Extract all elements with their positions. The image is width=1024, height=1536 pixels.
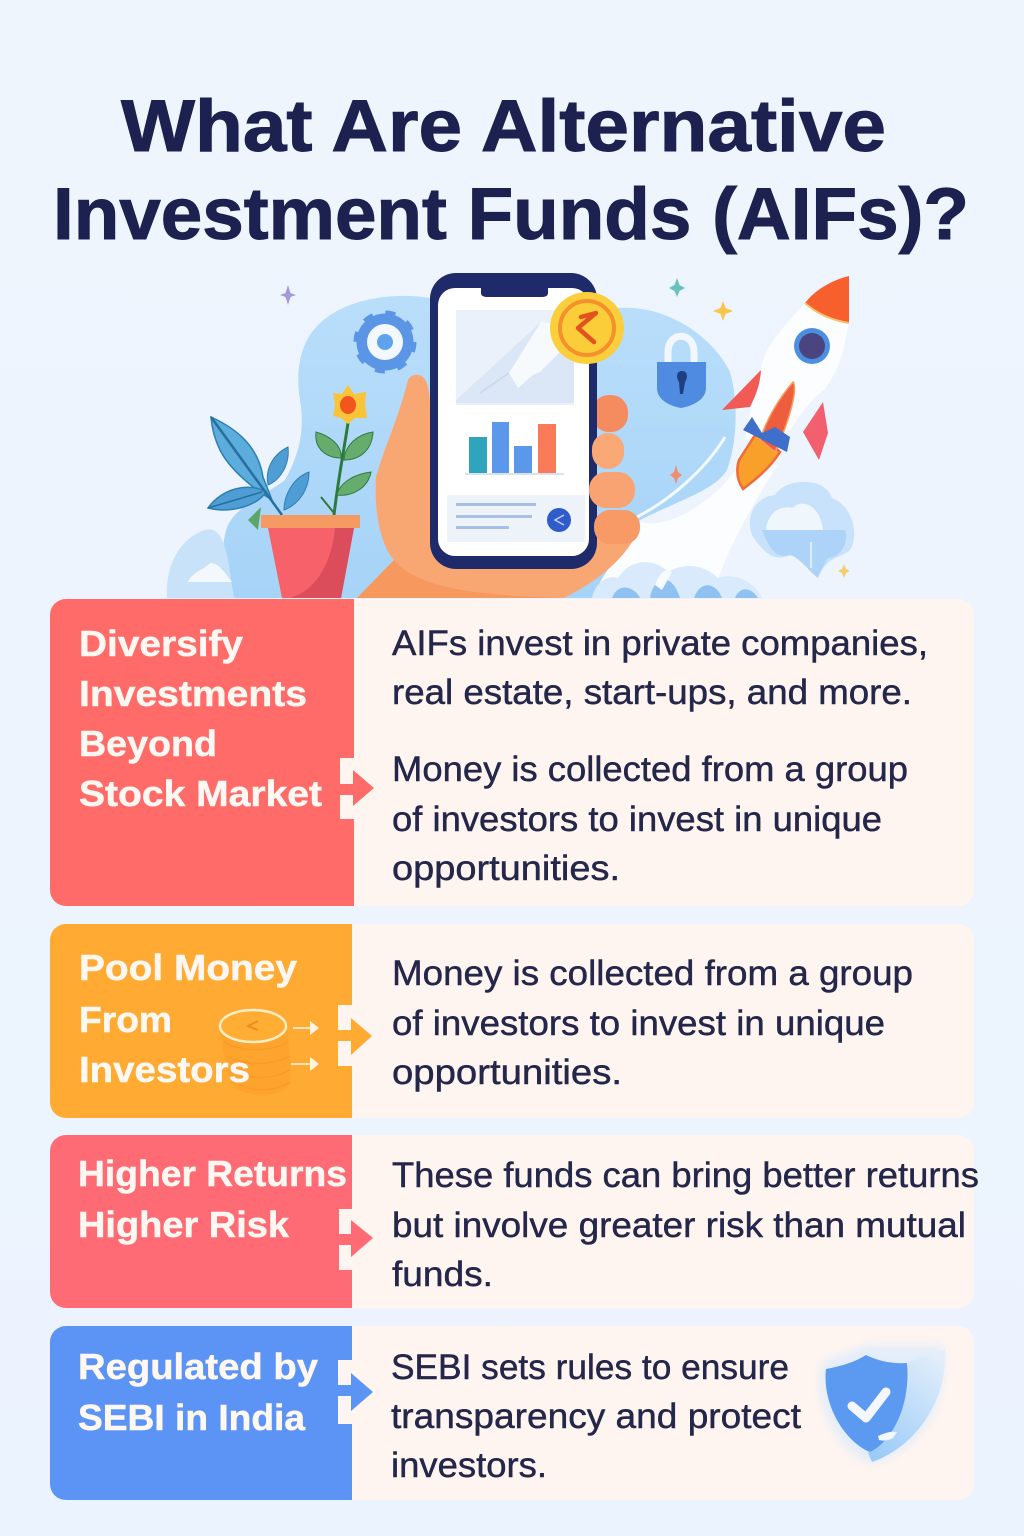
hand fingers [589, 433, 640, 544]
panel 4 body text: transparency and protect [391, 1397, 801, 1436]
panel 2 heading block: Pool Money [79, 947, 297, 988]
panel 1 heading block: Beyond [79, 723, 217, 764]
icon: gear [356, 313, 414, 371]
plant in pot [208, 385, 373, 598]
icon: rupee coin [550, 292, 624, 364]
panel 3 body text: funds. [392, 1255, 493, 1294]
panel 1 arrow [340, 758, 374, 819]
chart card [456, 310, 574, 405]
title: Investment Funds (AIFs)? [53, 174, 969, 255]
panel 1 body text [392, 624, 928, 888]
panel 2 heading block [50, 924, 352, 1118]
panel 1 body text: AIFs invest in private companies, [392, 624, 928, 663]
panel 1 body text: Money is collected from a group [392, 750, 908, 789]
exhaust clouds [592, 562, 762, 598]
panel 3 arrow [339, 1209, 373, 1270]
panel 1 heading block: Investments [79, 673, 307, 714]
rocket with exhaust trail [592, 276, 849, 598]
panel 1 heading block: Stock Market [79, 773, 322, 814]
panel 3: returns and risk [50, 1135, 979, 1308]
bar chart [465, 422, 564, 475]
panel 3 heading block: Higher Risk [78, 1204, 290, 1245]
panel 2 body text: opportunities. [392, 1053, 622, 1092]
phone [430, 273, 597, 569]
panel 2 body text: Money is collected from a group [392, 954, 913, 993]
icon: padlock [657, 336, 706, 408]
title: What Are Alternative [121, 86, 886, 167]
hand holding phone [357, 375, 640, 598]
panel 2 heading block: From [79, 999, 172, 1040]
panel 1 heading block [50, 599, 354, 906]
panel 1 heading block: Diversify [79, 623, 243, 664]
panel 3 body text: but involve greater risk than mutual [392, 1206, 966, 1245]
panel 4 heading block: SEBI in India [78, 1397, 306, 1438]
panel 4 heading block [50, 1326, 352, 1500]
panel 4 body text: SEBI sets rules to ensure [391, 1348, 789, 1387]
panel 1 body text: opportunities. [392, 849, 620, 888]
panel 4 arrow [338, 1360, 373, 1424]
panel 3 body text: These funds can bring better returns [392, 1156, 979, 1195]
icon: shield with check [820, 1345, 945, 1464]
icon: coin stack with arrows [220, 1010, 319, 1095]
panel 1 body text: of investors to invest in unique [392, 800, 882, 839]
panel 4: SEBI regulation [50, 1326, 974, 1500]
background blobs and clouds [167, 296, 854, 598]
panel 4 heading block: Regulated by [78, 1346, 318, 1387]
panel 2 arrow [338, 1005, 372, 1066]
panel 2 heading block: Investors [79, 1049, 250, 1090]
panel 2 body text [392, 954, 913, 1092]
panel 4 body text [391, 1348, 801, 1485]
illustration: fintech hero [167, 273, 854, 598]
panel 3 heading block: Higher Returns [78, 1153, 347, 1194]
panel 3 heading block [50, 1135, 352, 1308]
panel 4 body text: investors. [391, 1446, 547, 1485]
info card [447, 495, 585, 542]
title [53, 86, 969, 255]
panel 2: pool money [50, 924, 974, 1118]
panel 2 body text: of investors to invest in unique [392, 1004, 885, 1043]
sparkles [280, 278, 850, 578]
panel 3 body text [392, 1156, 979, 1294]
panel 1: diversify [50, 599, 974, 906]
panel 1 body text: real estate, start-ups, and more. [392, 673, 912, 712]
